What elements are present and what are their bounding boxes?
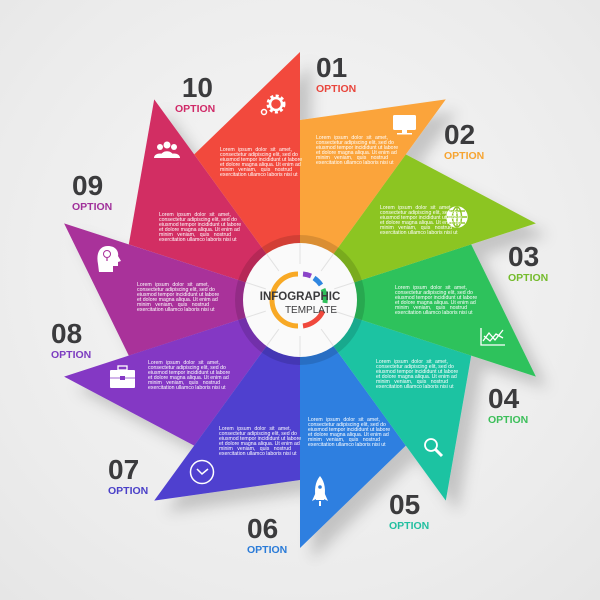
text block 04: eiusmod tempor incididunt ut labore [395,295,477,301]
blade 09 [64,223,300,356]
text block 02: et dolore magna aliqua. Ut enim ad [316,150,397,156]
text block 10: eiusmod tempor incididunt ut labore [159,222,241,228]
label 01: 01 [316,52,347,83]
text block 02: exercitation ullamco laboris nisi ut [316,160,394,166]
text block 03: minim veniam, quis nostrud [380,225,452,231]
blade 08 [64,300,300,446]
text block 06: eiusmod tempor incididunt ut labore [308,427,390,433]
text block 04: minim veniam, quis nostrud [395,305,467,311]
icon: head [97,246,121,272]
label 10: OPTION [175,103,215,115]
text block 05: eiusmod tempor incididunt ut labore [376,369,458,375]
text block 06: consectetur adipiscing elit, sed do [308,422,386,428]
center disc [243,243,357,357]
label 10: 10 [182,72,213,103]
text block 09: minim veniam, quis nostrud [137,302,209,308]
text block 09: consectetur adipiscing elit, sed do [137,287,215,293]
text block 09: eiusmod tempor incididunt ut labore [137,292,219,298]
blade 07 [154,300,300,501]
label 02: 02 [444,119,475,150]
text block 08: Lorem ipsum dolor sit amet, [148,360,220,366]
text block 07: minim veniam, quis nostrud [219,446,291,452]
blade 06 [300,300,406,548]
text block 06: minim veniam, quis nostrud [308,437,380,443]
text block 10: exercitation ullamco laboris nisi ut [159,237,237,243]
text block 05: consectetur adipiscing elit, sed do [376,364,454,370]
text block 03: et dolore magna aliqua. Ut enim ad [380,220,461,226]
text block 08: exercitation ullamco laboris nisi ut [148,385,226,391]
text block 01: exercitation ullamco laboris nisi ut [220,172,298,178]
text block 02: minim veniam, quis nostrud [316,155,388,161]
text block 01: Lorem ipsum dolor sit amet, [220,147,292,153]
icon: magnifier [425,439,442,456]
text block 08: et dolore magna aliqua. Ut enim ad [148,375,229,381]
text block 09: Lorem ipsum dolor sit amet, [137,282,209,288]
text block 08: consectetur adipiscing elit, sed do [148,365,226,371]
text block 06: Lorem ipsum dolor sit amet, [308,417,380,423]
text block 03: Lorem ipsum dolor sit amet, [380,205,452,211]
label 06 [247,513,287,556]
label 06: 06 [247,513,278,544]
label 05 [389,489,429,532]
text block 05: minim veniam, quis nostrud [376,379,448,385]
center title: TEMPLATE [285,305,337,316]
text block 01: minim veniam, quis nostrud [220,167,292,173]
icon: monitor [393,115,416,134]
text block 01: consectetur adipiscing elit, sed do [220,152,298,158]
label 10 [175,72,215,115]
label 08: 08 [51,318,82,349]
center donut logo [272,274,325,326]
text block 02 [316,135,398,166]
label 09 [72,170,112,213]
icon: rocket [312,476,328,506]
label 01: OPTION [316,83,356,95]
blade 03 [300,154,536,300]
text block 10 [159,212,241,243]
text block 04 [395,285,477,316]
blade 05 [300,300,471,501]
label 04: OPTION [488,414,528,426]
text block 09: exercitation ullamco laboris nisi ut [137,307,215,313]
label 03: OPTION [508,272,548,284]
text block 01: eiusmod tempor incididunt ut labore [220,157,302,163]
text block 07: Lorem ipsum dolor sit amet, [219,426,291,432]
text block 08 [148,360,230,391]
text block 03 [380,205,462,236]
label 07: OPTION [108,485,148,497]
text block 04: exercitation ullamco laboris nisi ut [395,310,473,316]
text block 04: consectetur adipiscing elit, sed do [395,290,473,296]
text block 10: minim veniam, quis nostrud [159,232,231,238]
text block 06: et dolore magna aliqua. Ut enim ad [308,432,389,438]
icon: gear [262,96,284,114]
blade 01 [194,52,300,300]
icon: clock [190,460,214,484]
label 05: OPTION [389,520,429,532]
text block 06 [308,417,390,448]
label 07: 07 [108,454,139,485]
icon: chart [481,328,505,345]
text block 05 [376,359,458,390]
text block 05: et dolore magna aliqua. Ut enim ad [376,374,457,380]
icon: people [154,142,180,158]
label 08 [51,318,91,361]
text block 04: et dolore magna aliqua. Ut enim ad [395,300,476,306]
icon: globe [447,207,467,227]
label 03 [508,241,548,284]
label 06: OPTION [247,544,287,556]
text block 03: exercitation ullamco laboris nisi ut [380,230,458,236]
text block 01: et dolore magna aliqua. Ut enim ad [220,162,301,168]
label 03: 03 [508,241,539,272]
text block 07: exercitation ullamco laboris nisi ut [219,451,297,457]
icon: briefcase [110,366,135,388]
text block 10: et dolore magna aliqua. Ut enim ad [159,227,240,233]
label 09: 09 [72,170,103,201]
center ring [235,235,365,365]
text block 06: exercitation ullamco laboris nisi ut [308,442,386,448]
text block 08: minim veniam, quis nostrud [148,380,220,386]
text block 02: eiusmod tempor incididunt ut labore [316,145,398,151]
text block 07 [219,426,301,457]
label 04 [488,383,528,426]
text block 07: et dolore magna aliqua. Ut enim ad [219,441,300,447]
text block 09: et dolore magna aliqua. Ut enim ad [137,297,218,303]
label 08: OPTION [51,349,91,361]
label 05: 05 [389,489,420,520]
text block 10: Lorem ipsum dolor sit amet, [159,212,231,218]
label 02: OPTION [444,150,484,162]
text block 03: eiusmod tempor incididunt ut labore [380,215,462,221]
text block 10: consectetur adipiscing elit, sed do [159,217,237,223]
blade 04 [300,244,536,377]
text block 05: Lorem ipsum dolor sit amet, [376,359,448,365]
label 09: OPTION [72,201,112,213]
label 07 [108,454,148,497]
text block 09 [137,282,219,313]
center title [260,291,340,316]
text block 04: Lorem ipsum dolor sit amet, [395,285,467,291]
text block 05: exercitation ullamco laboris nisi ut [376,384,454,390]
text block 07: eiusmod tempor incididunt ut labore [219,436,301,442]
blade 10 [129,99,300,300]
text block 07: consectetur adipiscing elit, sed do [219,431,297,437]
text block 08: eiusmod tempor incididunt ut labore [148,370,230,376]
center title: INFOGRAPHIC [260,291,340,303]
text block 02: Lorem ipsum dolor sit amet, [316,135,388,141]
text block 02: consectetur adipiscing elit, sed do [316,140,394,146]
label 01 [316,52,356,95]
label 04: 04 [488,383,519,414]
text block 01 [220,147,302,178]
label 02 [444,119,484,162]
text block 03: consectetur adipiscing elit, sed do [380,210,458,216]
blade 02 [300,99,446,300]
